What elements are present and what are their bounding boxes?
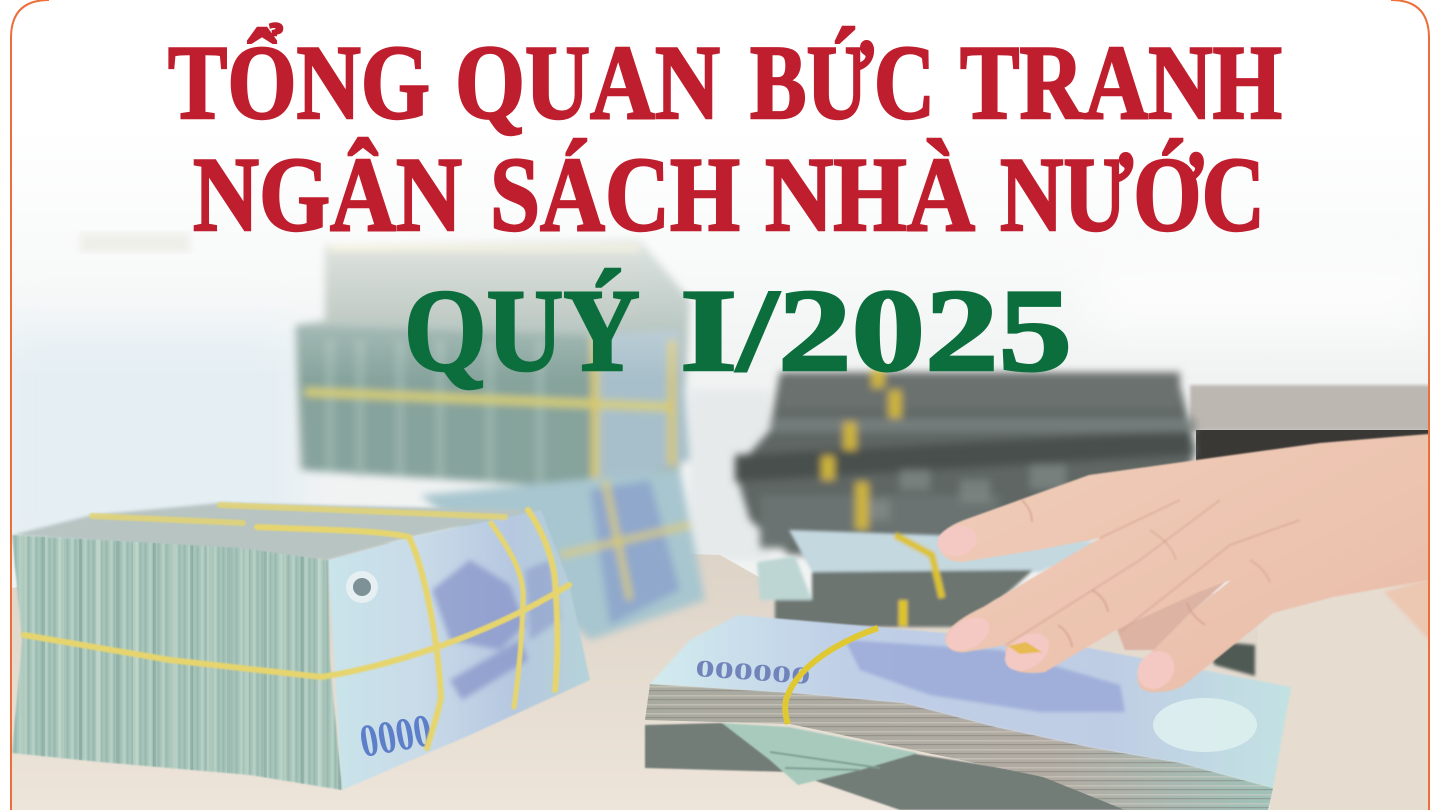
main bundle under the hand [645, 615, 1291, 810]
security hologram [346, 571, 378, 603]
map watermark [1153, 698, 1257, 752]
title line 2: NƯỚC [1000, 136, 1265, 253]
blurred room background [12, 230, 1428, 594]
bundle top note [650, 615, 1291, 788]
title line 1: BỨC [750, 24, 935, 141]
palm shadow [1116, 582, 1225, 650]
lower stack under main bundle [645, 723, 1130, 810]
title line 1 [168, 23, 1282, 141]
dark band behind hand [1196, 430, 1428, 461]
title line 1: TỔNG [168, 23, 430, 141]
stack front face [328, 510, 590, 790]
title line 3: I/2025 [680, 265, 1072, 396]
front left stack of notes [12, 503, 590, 790]
printed note artwork [845, 640, 1125, 712]
rubber band [785, 628, 878, 724]
fingernails [936, 526, 1174, 689]
white fade at top of photo [12, 100, 1428, 364]
table [12, 543, 1270, 810]
title line 2: NHÀ [765, 136, 975, 253]
back stack of notes [295, 240, 705, 640]
dark stack at the back right [735, 368, 1196, 555]
title line 2 [193, 136, 1265, 253]
hand silhouette and fingers [938, 433, 1440, 692]
stack side edge [12, 535, 342, 790]
title line 2: NGÂN [193, 136, 462, 253]
printed note artwork [432, 560, 560, 700]
title line 1: TRANH [960, 24, 1282, 141]
bundle edge layers [645, 684, 1273, 810]
title [168, 23, 1282, 253]
lower wrist [1384, 580, 1428, 640]
banknote denomination: 000000 [695, 656, 811, 690]
middle blue stack behind front stack [420, 470, 705, 640]
small stacks under hand [757, 530, 1255, 676]
back wall band [1190, 385, 1440, 431]
stack top face [12, 503, 541, 560]
finger creases [1006, 500, 1300, 647]
gold nail accent [1008, 642, 1042, 654]
right table surface [1270, 582, 1428, 810]
title line 2: SÁCH [490, 136, 740, 253]
title line 3: QUÝ [404, 265, 640, 396]
photo: money stacks and hand [12, 230, 1428, 810]
title line 3 [404, 265, 1072, 396]
rubber bands [24, 505, 569, 748]
banknote denomination: 0000 [356, 704, 436, 767]
title line 1: QUAN [455, 24, 720, 141]
hand [934, 433, 1440, 696]
